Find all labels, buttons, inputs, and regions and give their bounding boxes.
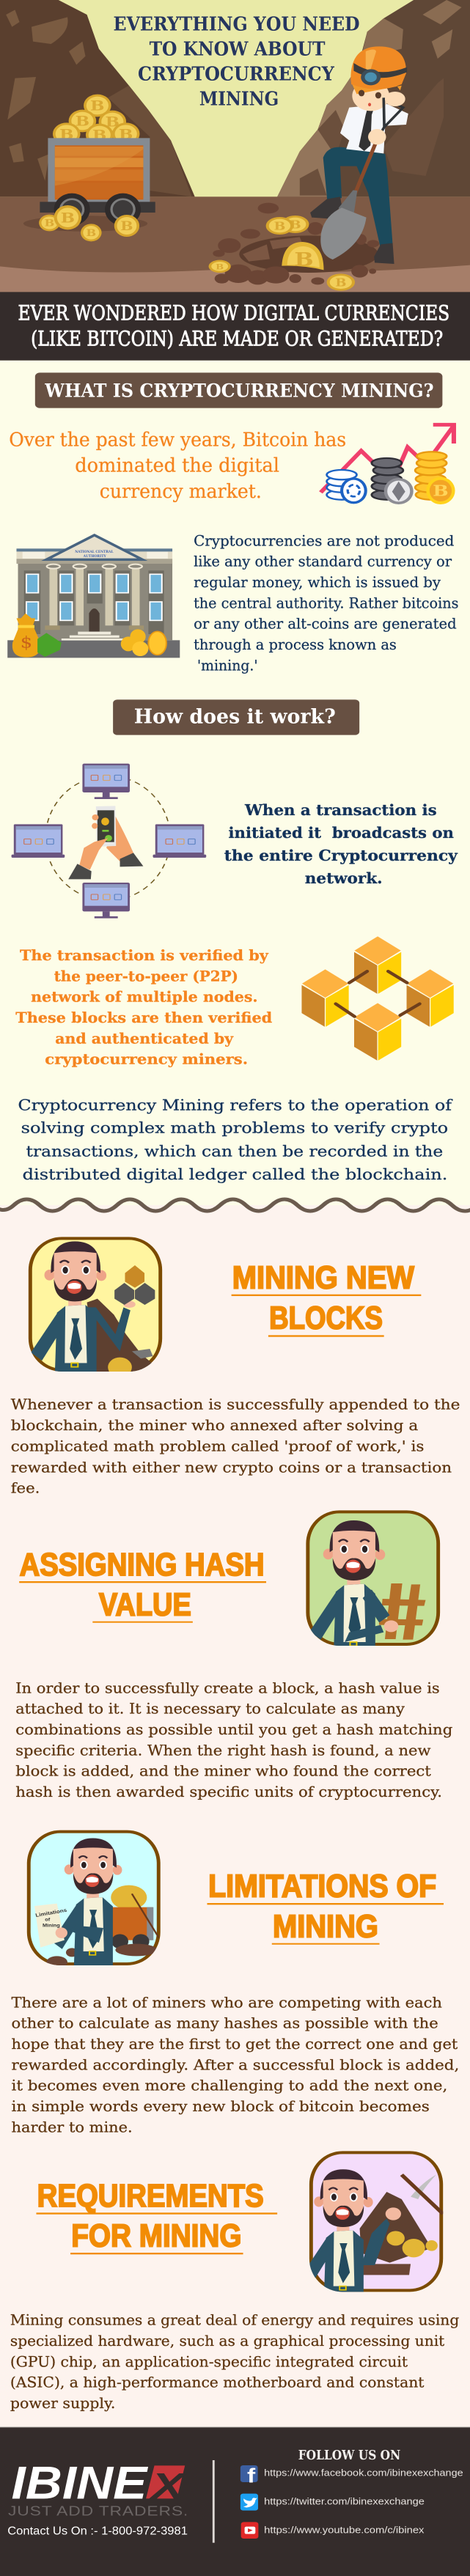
section heading: how does it work: How does it work? bbox=[134, 706, 336, 729]
rocks, hole and buried coins: B bbox=[216, 262, 224, 271]
network diagram: devices around phone bbox=[12, 764, 206, 919]
main title: TO KNOW ABOUT bbox=[150, 38, 326, 60]
right laptop bbox=[153, 824, 206, 858]
twitter link bbox=[240, 2494, 425, 2511]
mine cart with coins: B bbox=[90, 97, 105, 114]
mine cart with coins: B bbox=[76, 113, 89, 129]
icon: central bank building: NATIONAL CENTRAL bbox=[75, 550, 114, 554]
rocks, hole and buried coins: B bbox=[273, 220, 285, 233]
icon: blockchain cubes bbox=[301, 936, 454, 1061]
paragraph: cryptocurrency mining definition bbox=[18, 1097, 453, 1183]
icon: central bank building: AUTHORITY bbox=[83, 554, 106, 559]
text: transaction broadcast: When a transaction is bbox=[244, 801, 437, 819]
facebook link: f bbox=[247, 2465, 256, 2487]
heading: limitations of mining bbox=[207, 1869, 444, 1945]
section heading: what is cryptocurrency mining bbox=[35, 372, 442, 408]
paragraph: assigning hash value: attached to it. It is necessary to calculate as many bbox=[15, 1701, 405, 1718]
dark band headline bbox=[0, 292, 470, 361]
paragraph: requirements for mining bbox=[10, 2312, 459, 2412]
paragraph: cryptocurrency mining definition: Cryptocurrency Mining refers to the operation of bbox=[18, 1097, 453, 1114]
paragraph: cryptocurrency mining definition: distributed digital ledger called the blockchain. bbox=[23, 1166, 447, 1183]
phone in hands bbox=[68, 806, 143, 879]
hero illustration: mining scene bbox=[0, 0, 470, 292]
main title: MINING bbox=[199, 88, 279, 110]
facebook link bbox=[240, 2465, 463, 2487]
mine cart with coins: B bbox=[120, 219, 133, 233]
card: limitations illustration: Limitations bbox=[34, 1907, 67, 1918]
heading: requirements for mining: FOR MINING bbox=[71, 2218, 241, 2253]
follow us heading: FOLLOW US ON bbox=[298, 2448, 400, 2462]
orange intro text bbox=[9, 428, 346, 502]
mine cart with coins: B bbox=[61, 209, 75, 226]
card: limitations illustration: of bbox=[45, 1918, 51, 1922]
orange intro text: dominated the digital bbox=[75, 454, 279, 476]
mine cart with coins bbox=[23, 95, 155, 241]
paragraph: how cryptocurrencies are generated: 'mining.' bbox=[197, 657, 258, 674]
youtube link bbox=[241, 2522, 425, 2539]
heading: mining new blocks: MINING NEW bbox=[232, 1260, 414, 1295]
paragraph: mining new blocks: complicated math problem called 'proof of work,' is bbox=[11, 1438, 424, 1455]
icon: rising chart with coin stacks: B bbox=[433, 482, 449, 500]
paragraph: limitations of mining: harder to mine. bbox=[12, 2119, 133, 2136]
tagline: JUST ADD TRADERS. bbox=[8, 2504, 188, 2519]
paragraph: mining new blocks bbox=[11, 1396, 460, 1497]
twitter link: https://twitter.com/ibinexexchange bbox=[264, 2497, 425, 2507]
heading: requirements for mining: REQUIREMENTS bbox=[37, 2179, 264, 2214]
cash bbox=[37, 633, 62, 657]
youtube link: https://www.youtube.com/c/ibinex bbox=[264, 2525, 425, 2536]
main title: EVERYTHING YOU NEED bbox=[114, 13, 360, 35]
orange intro text: Over the past few years, Bitcoin has bbox=[9, 428, 346, 451]
rocks, hole and buried coins: B bbox=[335, 276, 346, 289]
mine cart with coins: B bbox=[86, 227, 96, 239]
mine cart with coins: B bbox=[92, 127, 106, 143]
text: transaction verification: cryptocurrency miners. bbox=[45, 1051, 248, 1068]
miner with helmet and shovel bbox=[310, 46, 408, 264]
main title: CRYPTOCURRENCY bbox=[138, 63, 335, 85]
paragraph: assigning hash value bbox=[15, 1679, 452, 1800]
heading: assigning hash value: VALUE bbox=[99, 1587, 191, 1622]
left mountain bbox=[0, 0, 195, 196]
text: transaction verification: the peer-to-peer (P2P) bbox=[54, 968, 238, 985]
orange intro text: currency market. bbox=[100, 480, 262, 502]
mine cart with coins: B bbox=[45, 217, 54, 229]
text: transaction verification: These blocks are then verified bbox=[15, 1009, 273, 1026]
heading: assigning hash value: ASSIGNING HASH bbox=[20, 1548, 265, 1583]
paragraph: cryptocurrency mining definition: transactions, which can then be recorded in the bbox=[26, 1143, 443, 1160]
page background: upper cream bbox=[0, 358, 470, 1205]
card: requirements illustration bbox=[309, 2151, 443, 2292]
rocks, hole and buried coins: B bbox=[294, 249, 314, 271]
ground bbox=[0, 196, 470, 292]
heading: mining new blocks: BLOCKS bbox=[269, 1300, 383, 1336]
card: hash value illustration bbox=[306, 1510, 440, 1646]
heading: requirements for mining bbox=[36, 2179, 277, 2254]
icon: central bank building bbox=[7, 535, 180, 658]
card: limitations illustration: Mining bbox=[43, 1924, 60, 1928]
rocks, hole and buried coins: B bbox=[290, 218, 301, 232]
text: transaction verification: and authenticated by bbox=[55, 1030, 234, 1048]
paragraph: cryptocurrency mining definition: solving complex math problems to verify crypto bbox=[21, 1119, 448, 1137]
paragraph: how cryptocurrencies are generated: through a process known as bbox=[194, 636, 397, 653]
section heading: how does it work bbox=[113, 699, 359, 735]
contact number: Contact Us On :- 1-800-972-3981 bbox=[7, 2524, 188, 2537]
icon: rising chart with coin stacks bbox=[320, 424, 455, 504]
paragraph: mining new blocks: fee. bbox=[11, 1480, 40, 1497]
page background: lower blush bbox=[0, 1205, 470, 2481]
mine cart with coins: B bbox=[106, 114, 120, 130]
right mountain bbox=[277, 0, 470, 196]
paragraph: mining new blocks: blockchain, the miner who annexed after solving a bbox=[11, 1417, 418, 1434]
bottom monitor bbox=[82, 883, 130, 919]
text: transaction verification bbox=[15, 947, 273, 1068]
text: transaction broadcast: network. bbox=[305, 869, 383, 887]
heading: limitations of mining: MINING bbox=[273, 1909, 378, 1944]
card: mining new blocks illustration bbox=[28, 1237, 163, 1372]
heading: assigning hash value bbox=[19, 1548, 266, 1623]
brand logo: IBINE bbox=[12, 2457, 149, 2509]
rocks, hole and buried coins bbox=[209, 203, 379, 291]
paragraph: limitations of mining bbox=[12, 1994, 459, 2136]
mine cart with coins: B bbox=[59, 125, 73, 142]
money bag bbox=[12, 614, 40, 658]
mine cart with coins: B bbox=[119, 125, 133, 142]
text: transaction verification: The transaction is verified by bbox=[20, 947, 269, 964]
left laptop bbox=[12, 824, 65, 858]
gold coins bbox=[121, 629, 166, 656]
top monitor bbox=[82, 764, 130, 799]
main title bbox=[114, 13, 360, 110]
card: limitations illustration bbox=[29, 1832, 159, 1986]
footer bbox=[0, 2426, 470, 2576]
paragraph: requirements for mining: power supply. bbox=[10, 2395, 115, 2412]
text: transaction verification: network of multiple nodes. bbox=[31, 989, 258, 1006]
paragraph: how cryptocurrencies are generated bbox=[194, 532, 458, 674]
money bag: $ bbox=[21, 633, 32, 652]
text: transaction broadcast bbox=[224, 801, 458, 887]
brand logo: X bbox=[149, 2465, 188, 2506]
heading: mining new blocks bbox=[232, 1260, 421, 1337]
